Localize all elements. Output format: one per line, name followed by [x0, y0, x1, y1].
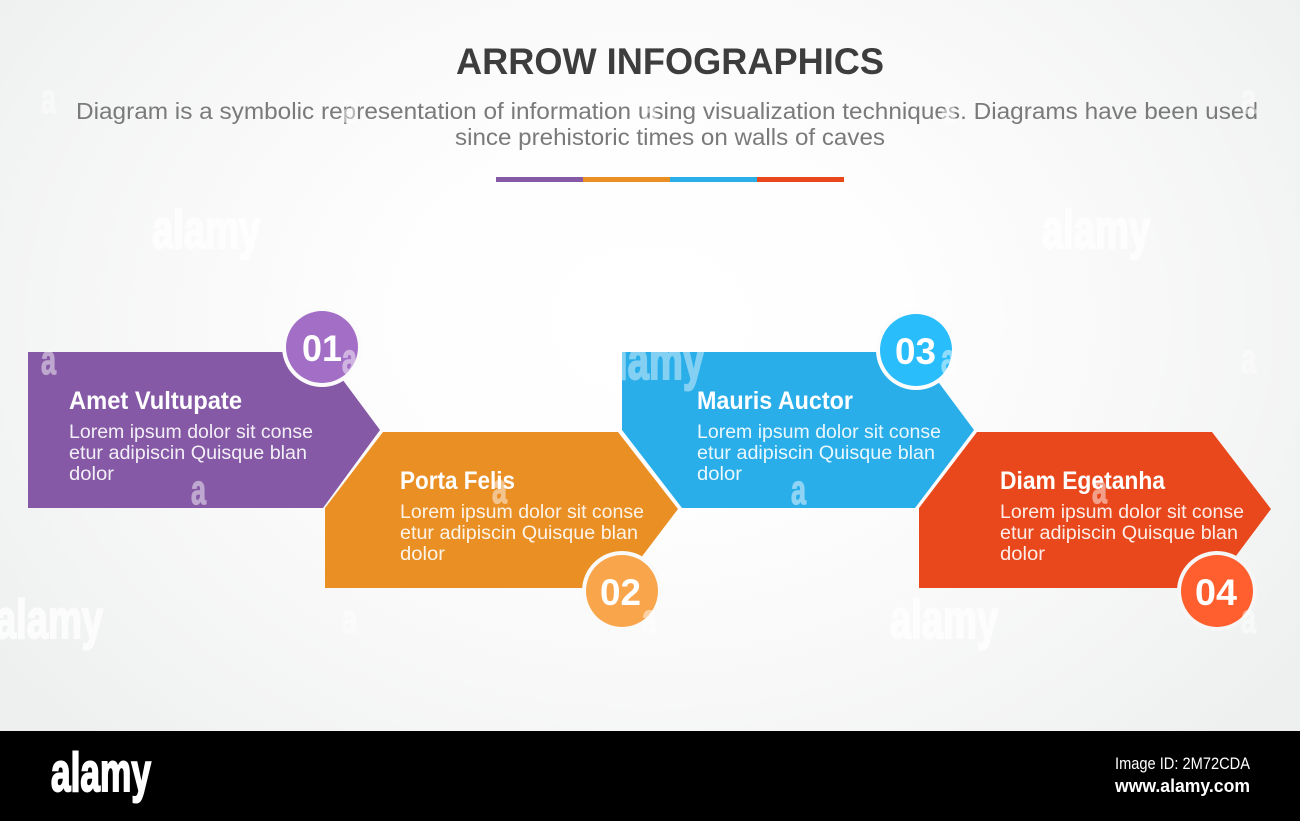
number badge 03: [876, 310, 956, 390]
step 2 body text: [400, 502, 644, 565]
panel: step 4 red arrow: [919, 432, 1271, 588]
footer image id: Image ID: 2M72CDA: [1115, 754, 1251, 773]
watermarks: a: [642, 595, 657, 642]
watermarks: a: [642, 84, 657, 131]
watermarks: a: [791, 466, 806, 513]
step 2 body text: Lorem ipsum dolor sit conse: [400, 502, 644, 523]
step 2 heading: Porta Felis: [400, 467, 515, 495]
step 1 body text: [69, 422, 313, 485]
number badge 02: 02: [600, 572, 641, 613]
step 3 body text: [697, 422, 941, 485]
step 1 heading: Amet Vultupate: [69, 387, 242, 415]
watermarks: alamy: [1042, 198, 1150, 260]
watermarks: a: [342, 595, 357, 642]
subtitle text: since prehistoric times on walls of caves: [455, 124, 885, 150]
watermarks: alamy: [152, 198, 260, 260]
number badge 02: [582, 551, 662, 631]
watermarks: alamy: [890, 588, 998, 650]
watermarks: [0, 75, 1256, 650]
step 2 body text: etur adipiscin Quisque blan: [400, 523, 638, 544]
watermarks: a: [342, 84, 357, 131]
watermarks: a: [41, 336, 56, 383]
colour divider bar: [496, 177, 844, 182]
step 3 body text: etur adipiscin Quisque blan: [697, 443, 935, 464]
watermarks: a: [492, 465, 507, 512]
step 1 body text: Lorem ipsum dolor sit conse: [69, 422, 313, 443]
step 4 body text: [1000, 502, 1244, 565]
footer bar: [0, 731, 1300, 821]
subtitle text: [76, 98, 1258, 150]
step 4 body text: etur adipiscin Quisque blan: [1000, 523, 1238, 544]
watermarks: a: [1241, 335, 1256, 382]
step 2 body text: dolor: [400, 544, 446, 565]
step 3 body text: Lorem ipsum dolor sit conse: [697, 422, 941, 443]
step 3 body text: dolor: [697, 464, 743, 485]
number badge 04: [1177, 551, 1257, 631]
step 4 body text: dolor: [1000, 544, 1046, 565]
panel: step 3 blue arrow: [622, 352, 974, 508]
footer website: www.alamy.com: [1114, 776, 1250, 796]
subtitle text: Diagram is a symbolic representation of information using visualization techniques. Diagrams have been used: [76, 98, 1258, 124]
step 4 body text: Lorem ipsum dolor sit conse: [1000, 502, 1244, 523]
step 4 heading: Diam Egetanha: [1000, 467, 1166, 495]
watermarks: a: [1241, 595, 1256, 642]
watermarks: a: [1092, 465, 1107, 512]
footer logo: alamy: [51, 741, 151, 803]
watermarks: a: [941, 335, 956, 382]
watermarks: alamy: [596, 329, 704, 391]
number badge 04: 04: [1195, 572, 1237, 613]
number badge 03: 03: [895, 331, 936, 372]
panel: step 1 purple arrow: [28, 352, 380, 508]
watermarks: a: [41, 75, 56, 122]
number badge 01: [282, 307, 362, 387]
step 3 heading: Mauris Auctor: [697, 387, 853, 415]
watermarks: a: [191, 466, 206, 513]
step 1 body text: etur adipiscin Quisque blan: [69, 443, 307, 464]
watermarks: a: [941, 84, 956, 131]
number badge 01: 01: [302, 328, 342, 369]
step 1 body text: dolor: [69, 464, 115, 485]
panel: step 2 orange arrow: [325, 432, 678, 588]
watermarks: a: [1241, 75, 1256, 122]
title: ARROW INFOGRAPHICS: [456, 41, 884, 82]
watermarks: a: [342, 335, 357, 382]
